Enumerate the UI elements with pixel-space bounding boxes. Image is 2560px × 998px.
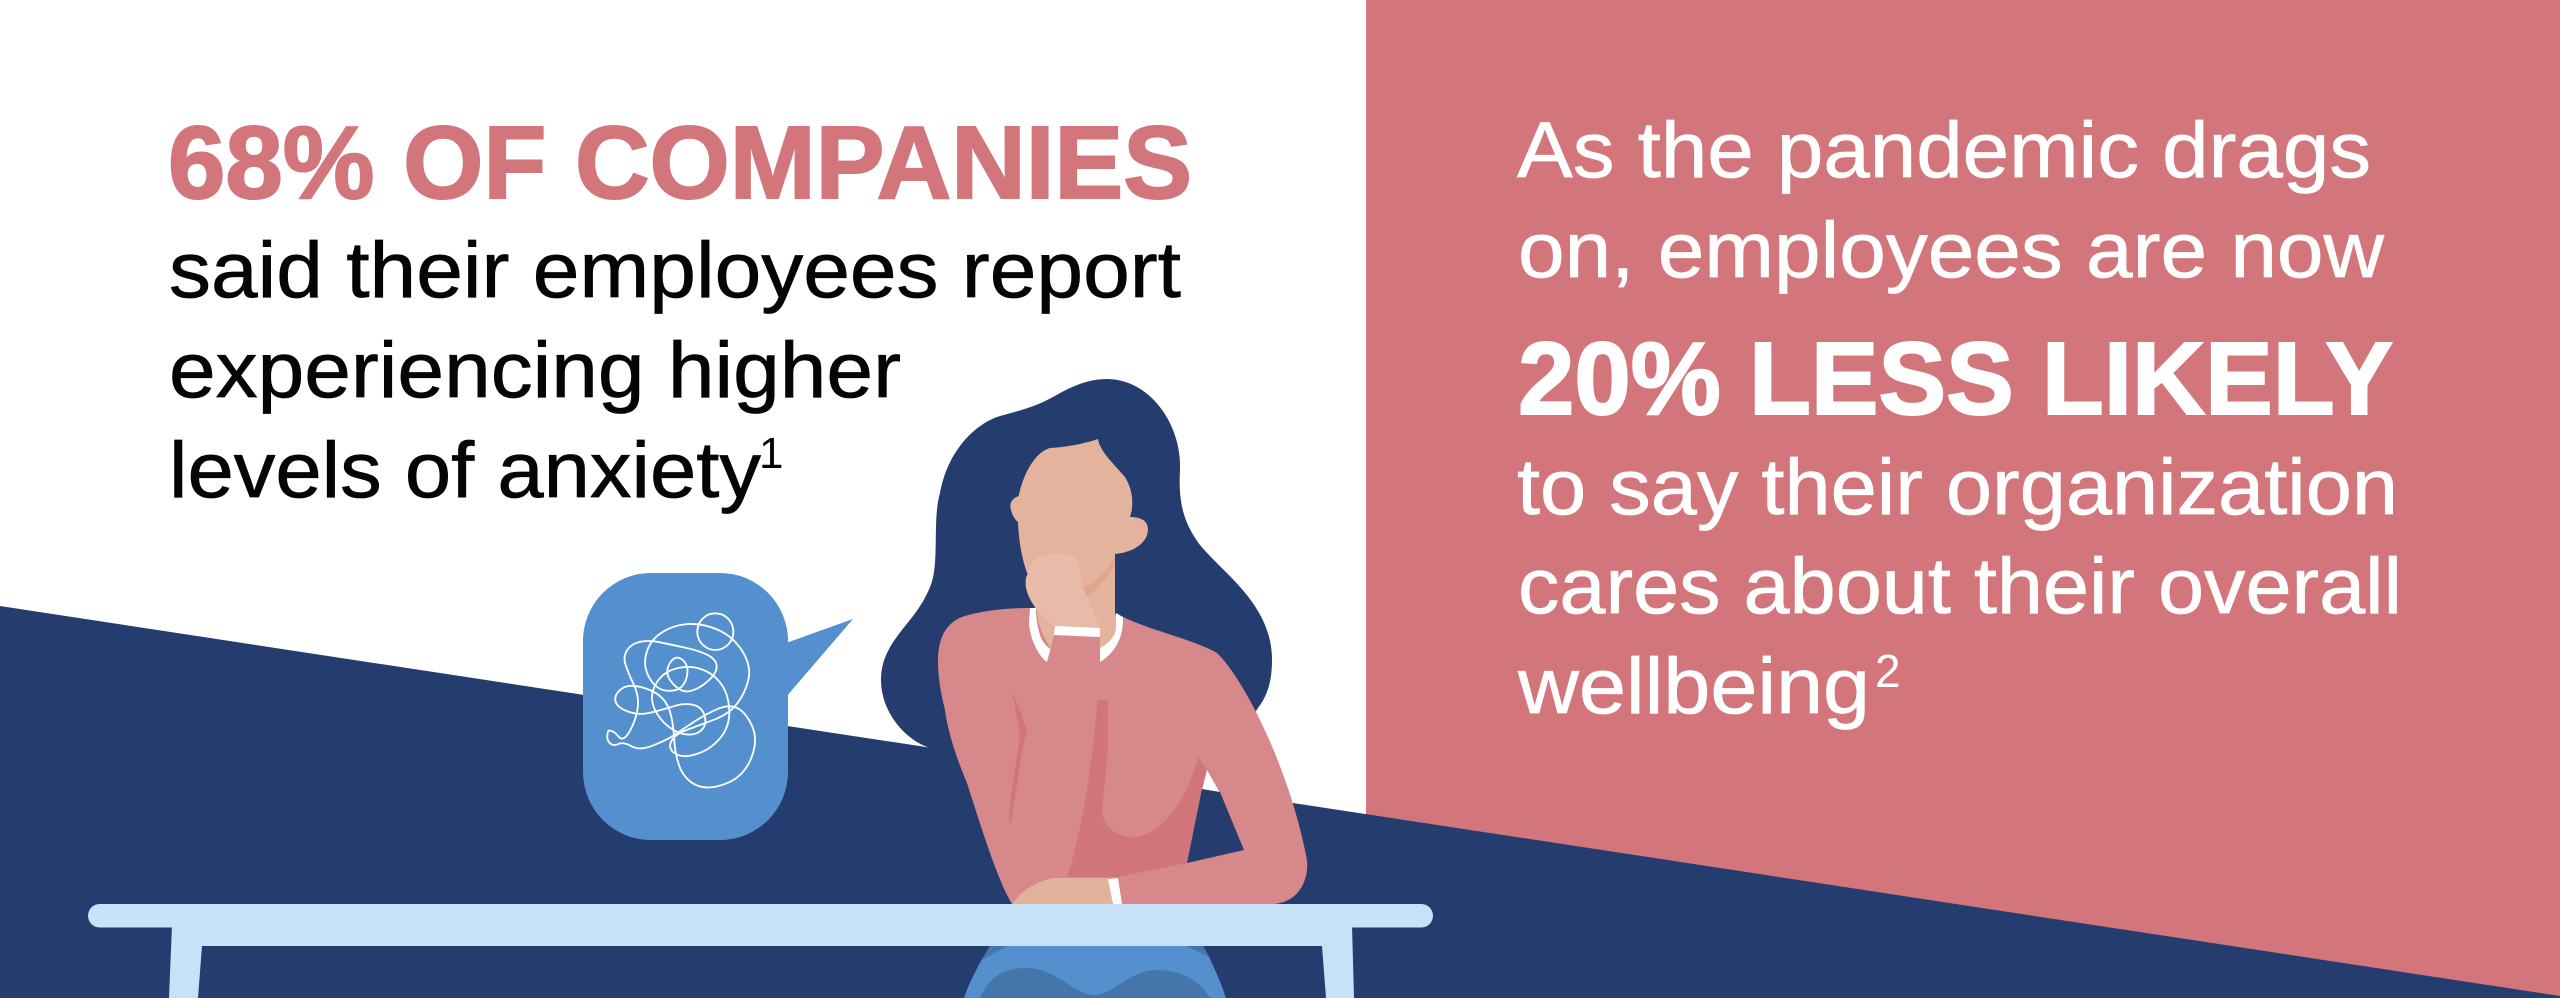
sweater <box>938 608 1307 904</box>
gap between arm and torso: navy <box>1187 789 1244 863</box>
panel: pink right background <box>1366 0 2560 998</box>
trousers <box>964 946 1226 998</box>
speech bubble tail <box>786 619 853 697</box>
ear <box>1010 496 1019 523</box>
resting hand <box>1012 878 1113 904</box>
tangled scribble <box>607 613 755 787</box>
wrist cuff <box>1108 878 1122 904</box>
left collar <box>1029 608 1052 662</box>
sleeve cuff <box>1054 626 1100 637</box>
body text line 2: experiencing higher <box>169 325 901 414</box>
intro line 1: As the pandemic drags <box>1517 105 2371 194</box>
heading: 20% less likely: 20% LESS LIKELY <box>1518 321 2393 436</box>
intro line 2: on, employees are now <box>1518 205 2385 294</box>
illustration: woman thinking at a desk <box>881 379 1307 998</box>
desk top <box>88 904 1433 928</box>
heading: 68% of companies: 68% OF COMPANIES <box>168 105 1192 220</box>
speech bubble body <box>583 573 788 840</box>
trouser waist shadows <box>982 946 1210 960</box>
body text line 1: said their employees report <box>169 225 1181 314</box>
gap between arm and torso: white <box>1202 770 1220 793</box>
body line 3: wellbeing <box>1517 641 1870 730</box>
desk <box>88 904 1433 998</box>
footnote marker 2: 2 <box>1875 645 1901 697</box>
neck <box>1037 550 1120 652</box>
fist on chin <box>1026 553 1100 628</box>
sweater dark fold <box>1067 662 1207 877</box>
trouser shadows <box>980 968 1210 998</box>
forearm sleeve <box>1040 635 1108 700</box>
icon: speech bubble with tangled thoughts <box>583 573 853 840</box>
footnote marker 1: 1 <box>759 429 783 478</box>
text block: left statistic <box>168 105 1192 514</box>
text block: right statistic <box>1517 105 2402 730</box>
right collar <box>1100 613 1123 662</box>
sleeve crease <box>1009 690 1027 823</box>
body text line 3: levels of anxiety <box>169 425 762 514</box>
panel: navy diagonal floor <box>0 606 2560 998</box>
face <box>1018 439 1148 600</box>
hair <box>881 379 1272 800</box>
chin shadow <box>1083 557 1115 598</box>
body line 2: cares about their overall <box>1518 541 2402 630</box>
body line 1: to say their organization <box>1517 442 2398 531</box>
desk legs and apron <box>169 925 1354 998</box>
